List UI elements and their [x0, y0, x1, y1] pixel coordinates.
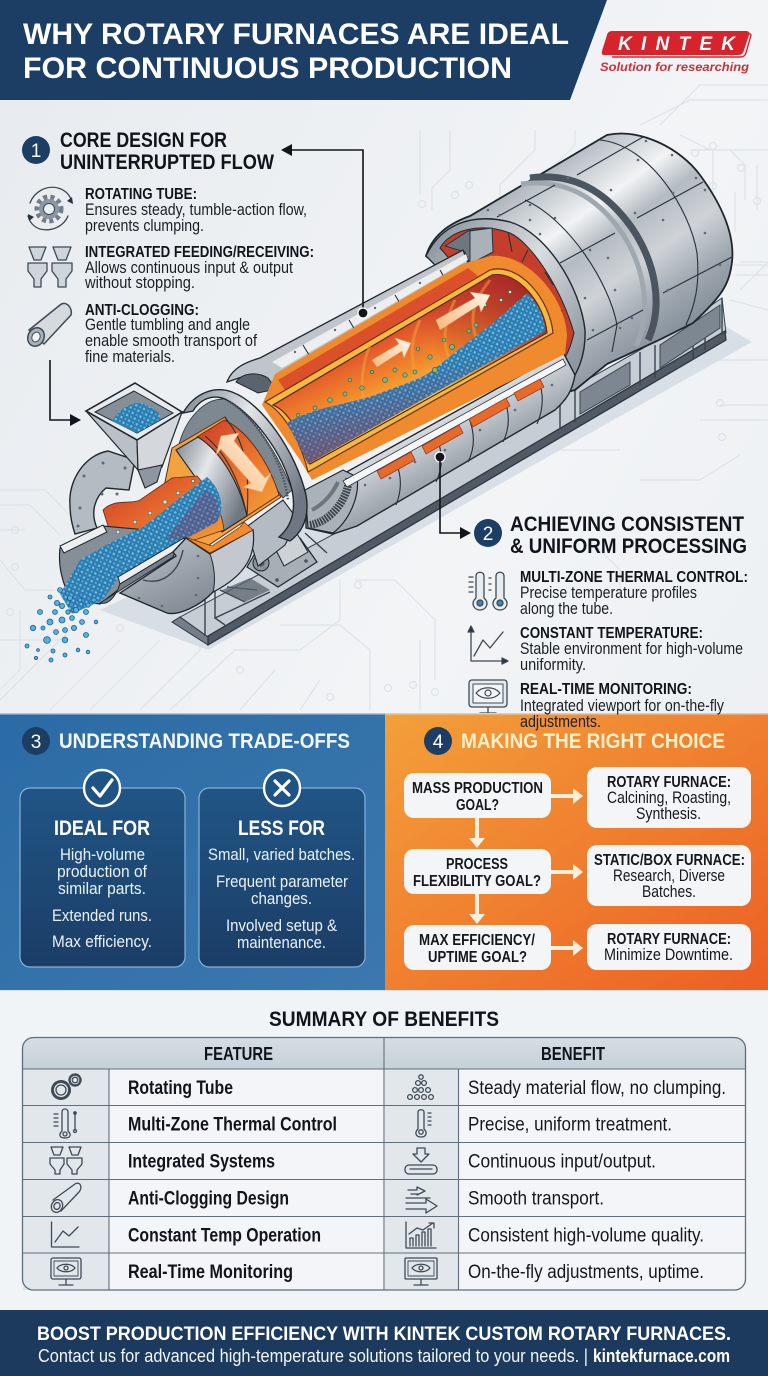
text: multi-zone: Precise temperature profiles — [520, 584, 697, 602]
box: rotary furnace 1: Calcining, Roasting, — [607, 789, 731, 807]
logo: KINTEK: Solution for researching — [600, 62, 749, 74]
icon: funnels — [28, 247, 72, 287]
icon: table gears — [52, 1074, 80, 1098]
end cap — [70, 451, 135, 534]
icon: table particles — [408, 1075, 433, 1099]
icon: table pipe — [49, 1183, 81, 1214]
loose particles — [296, 290, 512, 417]
panel: trade-offs — [0, 713, 385, 990]
box: static box furnace: Batches. — [642, 883, 696, 901]
card: less for: Small, varied batches. — [208, 845, 355, 864]
icon: monitor — [469, 680, 507, 713]
text: real-time monitoring: adjustments. — [520, 713, 601, 731]
table header labels: BENEFIT — [541, 1043, 606, 1064]
box: max efficiency: UPTIME GOAL? — [428, 949, 527, 966]
card: ideal for: Extended runs. — [52, 906, 152, 925]
summary heading: SUMMARY OF BENEFITS — [269, 1008, 499, 1031]
double rotation arrow — [216, 433, 271, 492]
box: rotary furnace 2: ROTARY FURNACE: — [607, 931, 731, 948]
text: real-time monitoring: REAL-TIME MONITORING: — [520, 681, 692, 698]
falling particles — [25, 588, 98, 662]
text: integrated feeding: without stopping. — [84, 274, 195, 292]
feature names: Integrated Systems — [128, 1152, 275, 1172]
text: real-time monitoring — [520, 681, 725, 731]
icon: rotating gear — [28, 187, 73, 230]
icon: pipe — [25, 303, 71, 349]
card: less for — [199, 770, 365, 967]
section 2 heading: 2 — [483, 524, 493, 545]
section 1 heading: CORE DESIGN FOR — [60, 129, 227, 152]
main interior — [262, 256, 567, 480]
dark ring band — [530, 177, 656, 340]
card: ideal for — [20, 770, 185, 967]
panel: making the right choice — [385, 713, 768, 990]
icon: thermometers — [469, 572, 507, 610]
section 3 heading — [22, 727, 350, 755]
text: rotating tube: prevents clumping. — [85, 217, 204, 235]
card: less for: changes. — [251, 889, 312, 908]
text: rotating tube — [85, 186, 307, 235]
card: less for: maintenance. — [237, 933, 326, 952]
section 1 heading — [22, 129, 274, 174]
summary table — [22, 1038, 746, 1290]
box: max efficiency — [404, 925, 551, 970]
icon: table benefit monitor — [405, 1258, 437, 1285]
card: ideal for: Max efficiency. — [52, 932, 152, 951]
footer contact line: Contact us for advanced high-temperature solutions tailored to your needs. | — [38, 1346, 588, 1366]
section 4 heading — [424, 727, 725, 755]
feature names — [128, 1078, 337, 1283]
feature names: Multi-Zone Thermal Control — [128, 1114, 337, 1136]
box: rotary furnace 1 — [587, 767, 751, 828]
title — [23, 18, 569, 85]
furnace illustration — [25, 134, 752, 662]
table header labels: FEATURE — [204, 1043, 273, 1064]
icon: table conveyor — [405, 1148, 437, 1174]
section 4 heading: 4 — [433, 732, 444, 753]
section 3 heading: 3 — [31, 732, 41, 753]
section 2 heading: & UNIFORM PROCESSING — [510, 535, 747, 558]
benefit texts: On-the-fly adjustments, uptime. — [468, 1262, 704, 1283]
near lower cover — [120, 522, 254, 614]
footer band — [0, 1310, 768, 1376]
title: WHY ROTARY FURNACES ARE IDEAL — [23, 18, 569, 51]
bearing — [247, 532, 317, 587]
front ring — [183, 390, 307, 541]
material stream — [60, 477, 221, 614]
section 3 heading: UNDERSTANDING TRADE-OFFS — [59, 730, 350, 753]
box: rotary furnace 2 — [587, 924, 751, 970]
section 4 heading: MAKING THE RIGHT CHOICE — [461, 730, 725, 753]
box: rotary furnace 2: Minimize Downtime. — [604, 946, 733, 964]
lower background — [0, 991, 768, 1310]
box: process flexibility — [404, 849, 551, 894]
icon: line chart — [468, 626, 508, 664]
benefit texts: Precise, uniform treatment. — [468, 1114, 672, 1136]
box: mass production — [404, 773, 551, 818]
card: less for: Frequent parameter — [216, 872, 348, 891]
drum front rim and refractory opening — [426, 219, 585, 394]
benefit texts: Continuous input/output. — [468, 1152, 656, 1172]
icon: table funnels — [50, 1147, 82, 1174]
box: static box furnace — [587, 845, 751, 906]
text: anti-clogging — [85, 302, 257, 366]
title: FOR CONTINUOUS PRODUCTION — [23, 52, 512, 85]
flow arrows — [469, 788, 583, 956]
hopper — [86, 383, 182, 488]
inner ring backing — [178, 399, 292, 498]
icon: table thermometer — [416, 1110, 431, 1137]
base frame — [172, 298, 726, 645]
text: anti-clogging: enable smooth transport of — [85, 332, 257, 350]
text: constant temperature — [520, 625, 743, 674]
icon: table bar chart — [406, 1222, 436, 1248]
far drum shell — [426, 134, 732, 395]
hub segment — [305, 470, 358, 533]
text: real-time monitoring: Integrated viewport for on-the-fly — [520, 697, 725, 715]
upper shell strip — [227, 250, 470, 393]
arrow: to hopper — [50, 360, 81, 426]
lower shell trim and bricks — [343, 359, 566, 487]
benefit texts: Steady material flow, no clumping. — [468, 1078, 726, 1099]
box: mass production: MASS PRODUCTION — [412, 780, 543, 797]
chute back — [60, 526, 190, 604]
text: constant temperature: CONSTANT TEMPERATURE: — [520, 625, 703, 642]
icon: table line chart — [52, 1222, 79, 1247]
card: ideal for: High-volume — [60, 845, 145, 864]
box: process flexibility: PROCESS — [446, 856, 508, 873]
lower shell — [247, 352, 575, 587]
benefit texts — [468, 1078, 726, 1283]
feature names: Real-Time Monitoring — [128, 1262, 293, 1283]
benefit texts: Consistent high-volume quality. — [468, 1226, 704, 1246]
text: constant temperature: uniformity. — [520, 656, 586, 674]
text: rotating tube: ROTATING TUBE: — [85, 186, 197, 203]
icon: table thermometer controls — [54, 1109, 76, 1138]
logo: KINTEK: KINTEK — [618, 34, 736, 55]
text: rotating tube: Ensures steady, tumble-action flow, — [85, 201, 307, 219]
box: static box furnace: Research, Diverse — [613, 867, 725, 885]
box: rotary furnace 1: Synthesis. — [636, 805, 701, 823]
section 1 heading: UNINTERRUPTED FLOW — [60, 151, 274, 174]
card: ideal for: production of — [57, 862, 147, 881]
feature names: Anti-Clogging Design — [128, 1188, 289, 1210]
text: anti-clogging: ANTI-CLOGGING: — [85, 302, 199, 319]
box: rotary furnace 1: ROTARY FURNACE: — [607, 774, 731, 791]
text: integrated feeding: INTEGRATED FEEDING/RECEIVING: — [85, 244, 314, 261]
text: multi-zone: along the tube. — [520, 600, 613, 618]
box: process flexibility: FLEXIBILITY GOAL? — [413, 873, 541, 890]
flow arrows — [372, 292, 490, 367]
section 1 heading: 1 — [31, 141, 41, 162]
near interior section — [103, 417, 281, 555]
icon: table monitor — [51, 1258, 81, 1285]
card: less for: LESS FOR — [238, 817, 325, 840]
text: integrated feeding: Allows continuous input & output — [85, 259, 293, 277]
text: integrated feeding — [84, 244, 314, 292]
feature names: Rotating Tube — [128, 1078, 233, 1099]
text: anti-clogging: Gentle tumbling and angle — [85, 316, 250, 334]
panel seams — [497, 137, 732, 352]
text: multi-zone — [520, 569, 748, 618]
rivets — [487, 140, 721, 331]
logo: KINTEK — [600, 31, 751, 74]
text: anti-clogging: fine materials. — [85, 348, 175, 366]
card: less for: Involved setup & — [226, 916, 338, 935]
benefit texts: Smooth transport. — [468, 1188, 604, 1210]
arrow: uniform processing callout — [435, 452, 471, 539]
box: max efficiency: MAX EFFICIENCY/ — [419, 932, 535, 949]
box: mass production: GOAL? — [456, 797, 499, 814]
footer contact line: kintekfurnace.com — [593, 1346, 730, 1366]
feature names: Constant Temp Operation — [128, 1226, 321, 1246]
chute lips — [60, 525, 186, 603]
section 2 heading — [474, 513, 747, 558]
sleeve below ring — [245, 500, 298, 566]
material bed — [287, 293, 545, 464]
header banner — [0, 0, 607, 100]
arrow: core design callout — [281, 144, 368, 318]
card: ideal for: IDEAL FOR — [54, 817, 150, 840]
section 2 heading: ACHIEVING CONSISTENT — [510, 513, 744, 536]
background circuit pattern — [0, 85, 768, 710]
ground shadow — [100, 325, 752, 650]
table header labels — [204, 1043, 606, 1064]
icon: table transport arrows — [406, 1187, 437, 1213]
card: ideal for: similar parts. — [58, 879, 146, 898]
